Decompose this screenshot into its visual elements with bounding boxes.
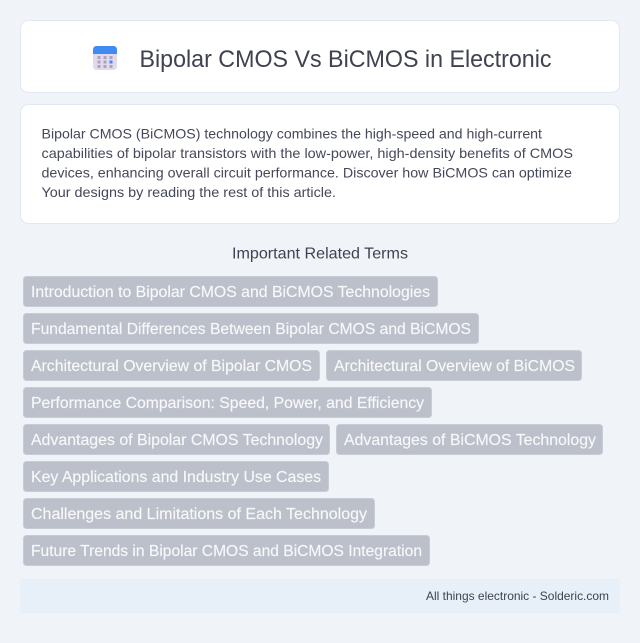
pill: fundamental differences: Fundamental Differences Between Bipolar CMOS and BiCMOS <box>31 321 471 338</box>
pill: fundamental differences <box>24 314 478 344</box>
pill: advantages bicmos <box>336 424 602 454</box>
text block: description: capabilities of bipolar transistors with the low-power, high-density benefits of CMOS <box>42 145 573 161</box>
pill: performance comparison <box>24 388 432 418</box>
title: Bipolar CMOS Vs BiCMOS in Electronic <box>140 46 552 73</box>
panel: header card <box>20 20 620 92</box>
pill: future trends <box>24 536 430 566</box>
text block: description: Your designs by reading the rest of this article. <box>42 184 336 200</box>
pill: architecture bipolar cmos <box>24 350 320 380</box>
text block: description <box>42 126 573 200</box>
pill: key applications: Key Applications and Industry Use Cases <box>31 469 321 486</box>
pill: introduction <box>24 276 438 306</box>
text block: description: devices, enhancing overall circuit performance. Discover how BiCMOS can optimize <box>42 164 572 180</box>
pill: performance comparison: Performance Comparison: Speed, Power, and Efficiency <box>31 395 424 412</box>
footer bar <box>20 579 620 613</box>
pill: key applications <box>24 462 328 492</box>
pill: future trends: Future Trends in Bipolar CMOS and BiCMOS Integration <box>31 543 422 560</box>
panel: description card <box>20 104 620 224</box>
pill: challenges <box>24 498 374 528</box>
pill: advantages bicmos: Advantages of BiCMOS Technology <box>344 432 596 449</box>
icon: calendar grid <box>93 46 117 70</box>
pill: architecture bipolar cmos: Architectural Overview of Bipolar CMOS <box>31 358 312 375</box>
pill: challenges: Challenges and Limitations of Each Technology <box>31 506 367 523</box>
pill: architecture bicmos: Architectural Overview of BiCMOS <box>334 358 575 375</box>
footer credit: All things electronic - Solderic.com <box>426 589 609 603</box>
pill: introduction: Introduction to Bipolar CMOS and BiCMOS Technologies <box>31 284 430 301</box>
pill: advantages bipolar cmos <box>24 424 330 454</box>
text block: description: Bipolar CMOS (BiCMOS) technology combines the high-speed and high-current <box>42 126 542 142</box>
heading: important related terms: Important Related Terms <box>232 246 408 262</box>
pill: architecture bicmos <box>326 350 582 380</box>
pill: advantages bipolar cmos: Advantages of Bipolar CMOS Technology <box>31 432 323 449</box>
